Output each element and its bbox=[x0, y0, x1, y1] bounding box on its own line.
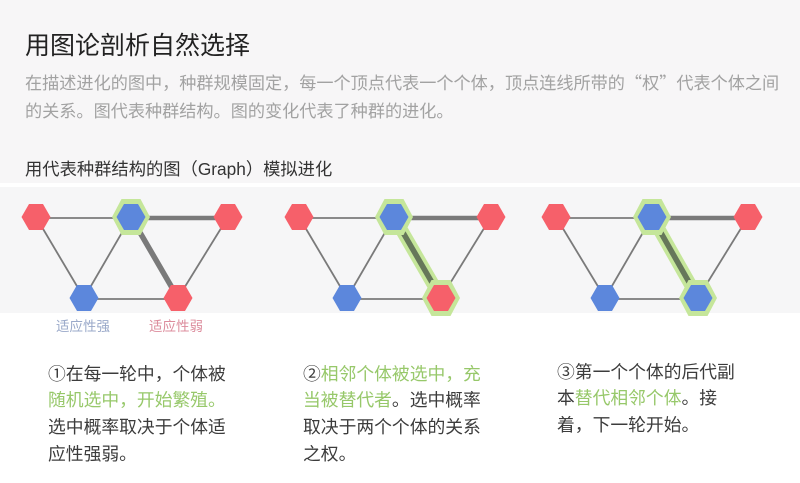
step 3 text bbox=[557, 362, 735, 435]
step 2 text bbox=[303, 364, 481, 464]
legend: strong fitness: 适应性强 bbox=[56, 319, 110, 334]
step 2 text: 当被替代者。选中概率 bbox=[303, 390, 481, 410]
graph 3: offspring replaces neighbour bbox=[542, 199, 762, 316]
step 2 text: 取决于两个个体的关系 bbox=[303, 417, 481, 437]
intro text: 在描述进化的图中，种群规模固定，每一个顶点代表一个个体，顶点连线所带的“权”代表个体之间 bbox=[25, 69, 779, 94]
step 1 text: 随机选中，开始繁殖。 bbox=[48, 390, 226, 410]
graph 2: neighbour selected bbox=[284, 199, 506, 316]
step 3 text: ③第一个个体的后代副 bbox=[557, 362, 735, 382]
title: 用图论剖析自然选择 bbox=[25, 32, 250, 60]
intro text bbox=[25, 69, 779, 121]
step 1 text: ①在每一轮中，个体被 bbox=[48, 364, 226, 384]
graph 1: selected individual bbox=[22, 199, 242, 311]
legend: weak fitness: 适应性弱 bbox=[149, 319, 203, 334]
step 2 text: ②相邻个体被选中，充 bbox=[303, 364, 481, 384]
step 3 text: 本替代相邻个体。接 bbox=[557, 388, 717, 408]
step 2 text: 之权。 bbox=[303, 444, 356, 464]
step 3 text: 着，下一轮开始。 bbox=[557, 415, 699, 435]
step 1 text: 应性强弱。 bbox=[48, 444, 137, 464]
graph diagrams bbox=[22, 199, 762, 316]
section heading: 用代表种群结构的图（Graph）模拟进化 bbox=[25, 159, 332, 179]
step 1 text bbox=[48, 364, 226, 464]
intro text: 的关系。图代表种群结构。图的变化代表了种群的进化。 bbox=[25, 101, 454, 121]
step 1 text: 选中概率取决于个体适 bbox=[48, 417, 226, 437]
